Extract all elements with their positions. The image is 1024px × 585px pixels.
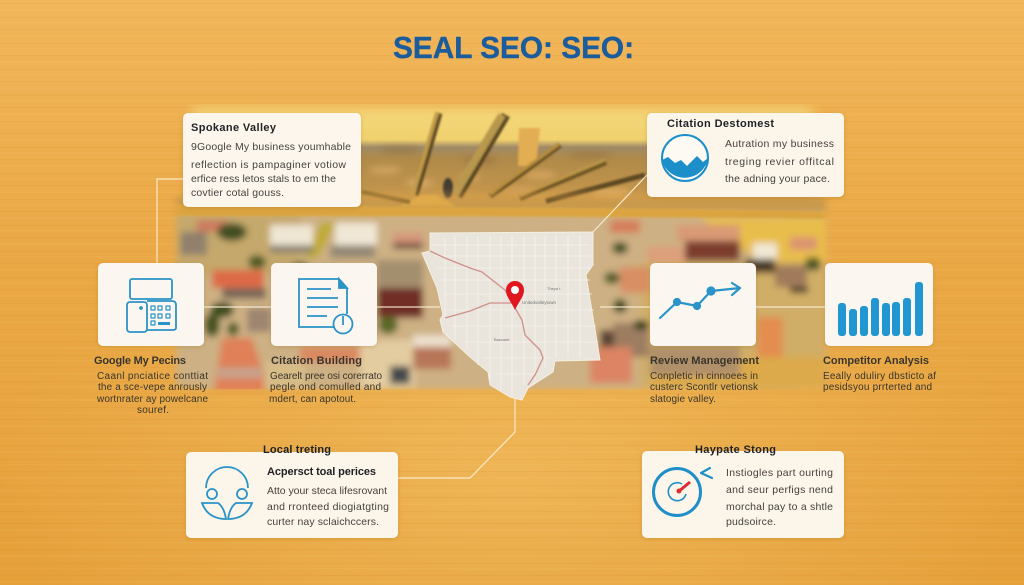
panel: Google My Pecins: souref. bbox=[137, 405, 169, 416]
icon: bar chart bbox=[838, 282, 923, 336]
icon: target gauge bbox=[654, 468, 712, 516]
panel: Competitor Analysis: pesidsyou prrterted and bbox=[823, 382, 932, 393]
panel: Competitor Analysis bbox=[823, 263, 936, 393]
panel: Review Management: slatogie valley. bbox=[650, 394, 716, 405]
panel: Spokane Valley: erfice ress letos stals to em the bbox=[191, 173, 336, 185]
map labels: Unitedvalleytown bbox=[522, 300, 557, 305]
map roads bbox=[430, 251, 543, 385]
panel: Haypate Stong: and seur perfigs nend bbox=[726, 484, 833, 496]
central map of Spokane Valley bbox=[422, 232, 600, 400]
panel: Review Management: Review Management bbox=[650, 355, 759, 367]
panel: Citation Building: Gearelt pree osi corerrato bbox=[270, 371, 382, 382]
icon: mountain badge bbox=[662, 135, 708, 181]
icon: document with clock bbox=[299, 279, 352, 334]
panel: Haypate Stong: Haypate Stong bbox=[695, 444, 776, 456]
panel: Competitor Analysis: Competitor Analysis bbox=[823, 355, 929, 367]
panel: Spokane Valley: covtier cotal gouss. bbox=[191, 187, 284, 199]
panel: Review Management bbox=[650, 263, 759, 405]
panel: Local treting: and rronteed diogiatgting bbox=[267, 501, 389, 513]
panel: Google My Pecins: the a sce-vepe anrously bbox=[98, 382, 207, 393]
gold road band bbox=[170, 195, 850, 219]
panel: Haypate Stong: morchal pay to a shtle bbox=[726, 501, 833, 513]
panel: Review Management: custerc Scontlr vetionsk bbox=[650, 382, 759, 393]
panel: Citation Destomest: treging revier offitcal bbox=[725, 156, 834, 168]
panel: Review Management: Conpletic in cinnoees in bbox=[650, 371, 758, 382]
panel: Spokane Valley: 9Google My business youmhable bbox=[191, 141, 351, 153]
map labels: Theya t bbox=[547, 286, 561, 291]
panel: Local treting bbox=[186, 444, 398, 538]
connector lines bbox=[157, 175, 825, 478]
panel: Citation Destomest: Citation Destomest bbox=[667, 118, 774, 130]
icon: phone and keypad bbox=[127, 279, 176, 332]
panel: Local treting: Acpersct toal perices bbox=[267, 466, 376, 478]
map labels bbox=[494, 286, 561, 342]
icon: two people in a circle bbox=[202, 467, 252, 519]
panel: Citation Destomest: the adning your pace. bbox=[725, 173, 830, 185]
tower and diagonal beams bbox=[362, 113, 645, 202]
panel: Citation Building: Citation Building bbox=[271, 355, 362, 367]
village ground and buildings bbox=[170, 212, 850, 392]
aerial photo of the valley bbox=[170, 104, 850, 392]
panel: Local treting: Atto your steca lifesrovant bbox=[267, 485, 387, 497]
panel: Spokane Valley: reflection is pampaginer votiow bbox=[191, 159, 346, 171]
map labels: Bascade bbox=[494, 337, 510, 342]
panel: Google My Pecins: Google My Pecins bbox=[94, 355, 186, 367]
panel: Competitor Analysis: Eeally oduliry dbsticto af bbox=[823, 371, 936, 382]
icon: trend line arrow bbox=[660, 283, 740, 318]
panel: Haypate Stong: pudsoirce. bbox=[726, 516, 776, 528]
panel: Citation Destomest: Autration my business bbox=[725, 138, 834, 150]
distant landscape bbox=[170, 104, 850, 212]
panel: Haypate Stong: Instiogles part ourting bbox=[726, 467, 833, 479]
panel: Spokane Valley bbox=[183, 113, 361, 207]
panel: Citation Building: pegle ond comulled and bbox=[270, 382, 381, 393]
icon: location pin bbox=[506, 281, 524, 310]
panel: Local treting: curter nay sclaichccers. bbox=[267, 516, 379, 528]
panel: Google My Pecins: wortnrater ay powelcane bbox=[96, 394, 208, 405]
panel: Citation Destomest bbox=[647, 113, 844, 197]
panel: Citation Building: mdert, can apotout. bbox=[269, 394, 356, 405]
panel: Google My Pecins: Caanl pnciatice conttiat bbox=[97, 371, 208, 382]
title: SEAL SEO: SEO: bbox=[393, 30, 634, 65]
panel: Local treting: Local treting bbox=[263, 444, 331, 456]
panel: Spokane Valley: Spokane Valley bbox=[191, 122, 277, 134]
panel: Google My Pecins bbox=[94, 263, 208, 416]
panel: Citation Building bbox=[269, 263, 382, 405]
panel: Haypate Stong bbox=[642, 444, 844, 538]
